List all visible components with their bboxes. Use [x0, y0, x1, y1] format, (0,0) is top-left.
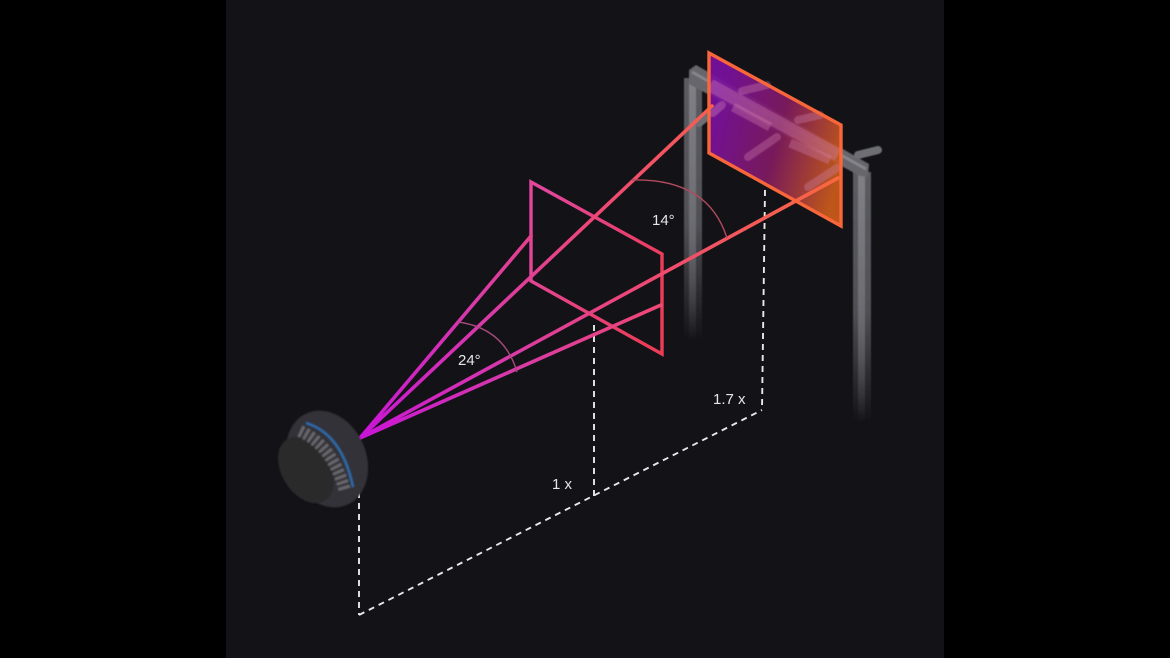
- blue ring: [306, 423, 353, 487]
- angle arc 24 degrees: [458, 322, 517, 372]
- label 24 degrees: 24°: [458, 352, 481, 369]
- lens face: [267, 427, 345, 513]
- background panel: [226, 0, 944, 658]
- label 1x: 1 x: [552, 476, 573, 493]
- far target plane fill: [709, 53, 841, 226]
- label 1.7x: 1.7 x: [713, 391, 746, 408]
- bolts: [699, 106, 878, 155]
- icon: camera: [267, 397, 383, 521]
- left post: [684, 78, 702, 340]
- label 14 degrees: 14°: [652, 212, 675, 229]
- right post: [853, 172, 871, 422]
- ribbed band: [300, 431, 345, 491]
- near field-of-view frame: [531, 182, 662, 354]
- bracket and bolt highlights on plane: [710, 85, 838, 187]
- camera body: [271, 397, 383, 521]
- crossbar: [689, 65, 869, 177]
- projection rays: [360, 106, 838, 438]
- dashed measurement lines: [359, 190, 765, 615]
- gantry frame: [684, 65, 878, 422]
- far target plane outline: [709, 53, 841, 226]
- angle arc 14 degrees: [632, 180, 727, 238]
